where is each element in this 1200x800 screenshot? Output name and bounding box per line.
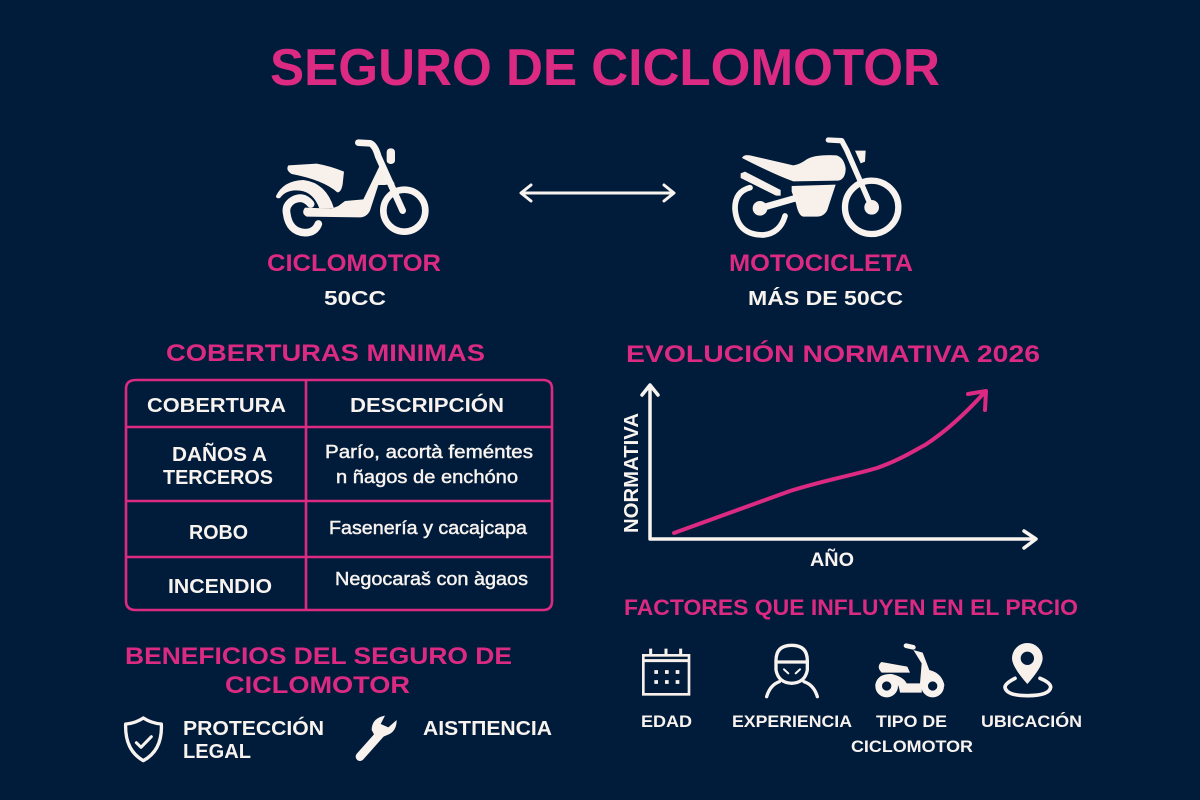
label: tipo de ciclomotor: TIPO DE	[876, 712, 947, 731]
row: daños a terceros: TERCEROS	[163, 466, 273, 489]
heading: factores: FACTORES QUE INFLUYEN EN EL PRCIO	[624, 595, 1078, 620]
arrow: double headed	[521, 185, 674, 201]
text: protección legal: LEGAL	[183, 740, 251, 763]
row: daños a terceros: DAÑOS A	[172, 443, 267, 466]
table header	[147, 393, 504, 417]
icon: calendar	[643, 649, 689, 694]
icon: location pin	[1005, 643, 1051, 696]
y axis label: NORMATIVA	[621, 413, 643, 533]
icon: scooter	[875, 646, 945, 694]
text: protección legal	[183, 716, 324, 763]
label: edad: EDAD	[641, 712, 692, 731]
row: incendio	[168, 569, 528, 598]
panel: comparison	[267, 140, 913, 310]
table header: DESCRIPCIÓN	[350, 393, 504, 417]
label: ciclomotor: CICLOMOTOR	[267, 250, 441, 277]
trend line	[674, 391, 986, 533]
x axis label: AÑO	[810, 549, 854, 571]
icon: shield	[126, 718, 161, 761]
text: asistencia: AISTΠENCIA	[423, 717, 552, 740]
heading: beneficios: CICLOMOTOR	[225, 672, 410, 699]
row: robo	[189, 518, 528, 544]
row: daños a terceros: n ñagos de enchóno	[336, 467, 518, 487]
title: SEGURO DE CICLOMOTOR	[270, 39, 940, 97]
row: robo: ROBO	[189, 521, 248, 544]
label: experiencia: EXPERIENCIA	[732, 712, 852, 731]
panel: price factors	[641, 643, 1082, 756]
axes	[642, 385, 1036, 548]
panel: benefits	[126, 716, 552, 763]
label: ubicación: UBICACIÓN	[981, 712, 1082, 731]
row: incendio: Negocaraš con àgaos	[335, 569, 528, 589]
icon: wrench	[360, 716, 397, 757]
chart: normative evolution	[621, 385, 1036, 571]
row: robo: Fasenería y cacajcapa	[329, 518, 528, 538]
text: protección legal: PROTECCIÓN	[183, 716, 324, 740]
icon: motorcycle	[735, 140, 898, 235]
table grid	[126, 380, 552, 610]
row: daños a terceros: Parío, acortà feméntes	[325, 442, 533, 462]
label: 50cc: 50CC	[324, 288, 386, 310]
heading: evolución normativa: EVOLUCIÓN NORMATIVA 2026	[626, 340, 1040, 368]
label: motocicleta: MOTOCICLETA	[729, 250, 913, 277]
heading: beneficios	[125, 643, 512, 699]
icon: moped	[276, 143, 425, 233]
table header: COBERTURA	[147, 394, 286, 417]
panel: coverage table	[126, 380, 552, 610]
icon: rider	[767, 645, 817, 697]
heading: coberturas: COBERTURAS MINIMAS	[166, 340, 485, 367]
label: tipo de ciclomotor	[851, 712, 973, 756]
label: tipo de ciclomotor: CICLOMOTOR	[851, 737, 973, 756]
heading: beneficios: BENEFICIOS DEL SEGURO DE	[125, 643, 512, 670]
row: incendio: INCENDIO	[168, 575, 272, 598]
row: daños a terceros	[163, 442, 533, 489]
label: más de 50cc: MÁS DE 50CC	[748, 287, 903, 310]
